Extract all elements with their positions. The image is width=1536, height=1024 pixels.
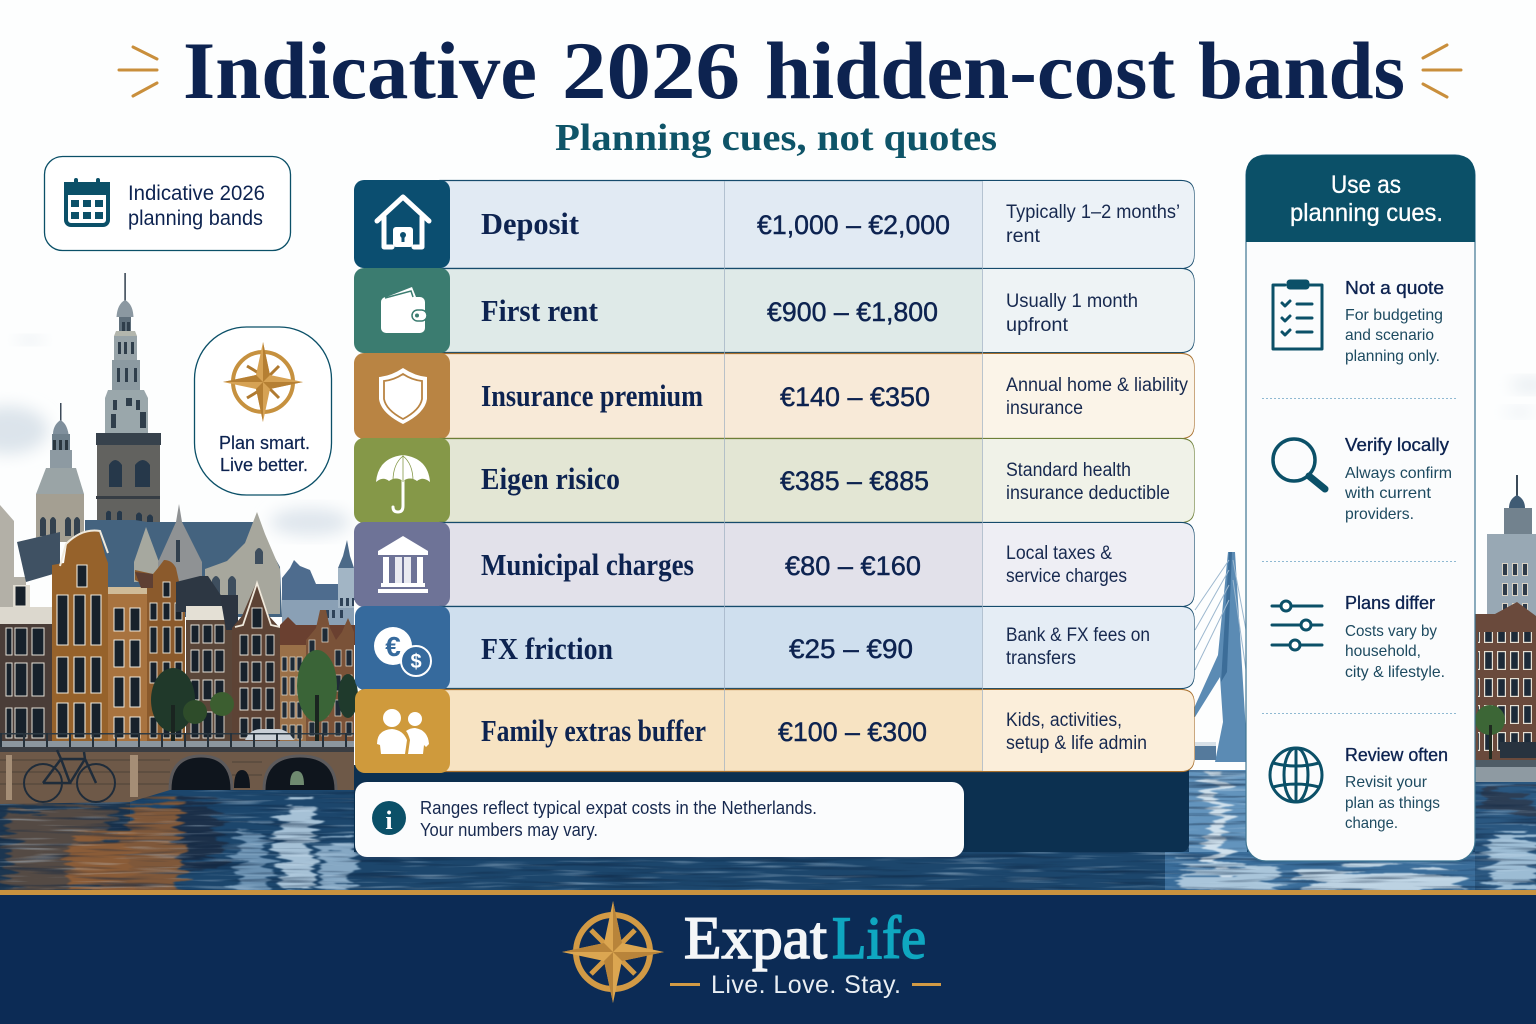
small church tower — [36, 403, 84, 542]
row: family extras buffer: Kids, activities, — [1006, 710, 1122, 731]
item: not a quote: and scenario — [1345, 327, 1434, 344]
row: municipal charges: Local taxes & — [1006, 543, 1112, 564]
icon: umbrella — [376, 455, 430, 512]
row: fx friction: FX friction — [481, 631, 613, 666]
icon: magnifier — [1273, 439, 1325, 489]
item: verify locally — [1273, 435, 1452, 523]
title accent: right rays — [1423, 45, 1461, 97]
item: plans differ: household, — [1345, 643, 1421, 660]
icon: compass — [223, 342, 303, 422]
item: verify locally: Verify locally — [1345, 435, 1449, 455]
house: dark roof with white cornice — [176, 576, 232, 746]
row: insurance premium: €140 – €350 — [780, 382, 930, 412]
icon: calendar — [66, 180, 108, 225]
logo wordmark: Expat — [684, 905, 827, 971]
right tower and brick building — [1475, 475, 1536, 782]
footer band — [0, 890, 1536, 1024]
panel header: planning cues. — [1290, 199, 1443, 227]
panel header: Use as — [1331, 171, 1401, 199]
row: deposit — [354, 180, 1194, 268]
icon: info: i — [385, 806, 393, 835]
row: deposit: Deposit — [481, 206, 580, 241]
icon: euro and dollar coins: $ — [410, 651, 422, 673]
badge: plan smart — [194, 327, 332, 495]
church roofs and stone gables — [85, 504, 282, 617]
item: review often — [1270, 745, 1448, 832]
row: eigen risico: insurance deductible — [1006, 483, 1170, 504]
note text: Your numbers may vary. — [420, 820, 598, 840]
icon: euro and dollar coins: € — [385, 631, 401, 662]
icon: info — [372, 801, 406, 835]
row: first rent — [354, 268, 1194, 353]
logo: compass — [562, 901, 664, 1003]
row: municipal charges: Municipal charges — [481, 547, 694, 582]
row: first rent: upfront — [1006, 315, 1069, 336]
title: bands — [1198, 25, 1405, 116]
row: fx friction: €25 – €90 — [789, 634, 913, 664]
icon: house with lock — [377, 197, 429, 247]
row: fx friction: Bank & FX fees on — [1006, 625, 1150, 646]
item: verify locally: Always confirm — [1345, 465, 1452, 482]
row: eigen risico: €385 – €885 — [780, 466, 929, 496]
item: review often: change. — [1345, 815, 1398, 832]
panel header — [1246, 155, 1475, 242]
row: eigen risico — [354, 438, 1194, 523]
row: first rent: Usually 1 month — [1006, 291, 1138, 312]
panel: use as planning cues — [1246, 155, 1475, 861]
item: verify locally: providers. — [1345, 506, 1414, 523]
badge: planning bands — [44, 156, 290, 250]
row: eigen risico: Standard health — [1006, 460, 1131, 481]
title: 2026 — [562, 25, 740, 116]
row: first rent: First rent — [481, 293, 599, 328]
note text: Ranges reflect typical expat costs in the Netherlands. — [420, 798, 817, 818]
reflections — [8, 775, 1536, 894]
row: municipal charges — [354, 522, 1194, 607]
logo tagline: Live. Love. Stay. — [711, 971, 901, 999]
badge tagline: Plan smart. — [219, 433, 310, 453]
row: municipal charges: service charges — [1006, 566, 1127, 587]
row: insurance premium: insurance — [1006, 398, 1083, 419]
subtitle: Planning cues, not quotes — [555, 117, 997, 159]
row: family extras buffer: setup & life admin — [1006, 733, 1147, 754]
row: insurance premium: Annual home & liability — [1006, 375, 1188, 396]
row: eigen risico: Eigen risico — [481, 461, 620, 496]
stone bridge — [0, 747, 354, 804]
icon: sliders — [1272, 601, 1322, 650]
item: plans differ: Costs vary by — [1345, 623, 1437, 640]
row: municipal charges: €80 – €160 — [785, 551, 921, 581]
icon: family — [377, 709, 429, 754]
item: review often: plan as things — [1345, 795, 1440, 812]
title accent: left rays — [119, 47, 157, 96]
row: deposit: €1,000 – €2,000 — [757, 210, 950, 240]
logo wordmark — [684, 905, 926, 971]
background: Amsterdam canal skyline — [0, 273, 1536, 804]
row: family extras buffer — [355, 689, 1194, 773]
item: not a quote: Not a quote — [1345, 278, 1444, 298]
icon: euro and dollar coins — [374, 627, 431, 676]
table of cost bands — [354, 180, 1194, 773]
icon: globe — [1270, 748, 1322, 802]
quay railing and car — [0, 729, 354, 748]
logo wordmark: Life — [832, 905, 926, 971]
bicycle — [24, 750, 115, 802]
row: deposit: rent — [1006, 226, 1041, 247]
house: white cornice left — [0, 505, 60, 746]
badge text: Indicative 2026 — [128, 182, 265, 205]
right bridge pylon and stays — [1190, 552, 1246, 762]
distant buildings right of row — [282, 540, 356, 635]
row: deposit: Typically 1–2 months’ — [1006, 202, 1180, 223]
badge tagline — [219, 433, 310, 475]
badge text: planning bands — [128, 207, 263, 230]
badge text — [128, 182, 265, 230]
house: brown stepped gable — [135, 560, 185, 746]
badge tagline: Live better. — [220, 455, 308, 475]
row: insurance premium — [354, 353, 1194, 439]
title: hidden-cost — [765, 25, 1175, 116]
house: orange brick gable — [52, 531, 108, 746]
item: review often: Revisit your — [1345, 774, 1428, 791]
row: fx friction: transfers — [1006, 648, 1076, 669]
dark backing block under table — [354, 765, 1189, 852]
canal water — [0, 770, 1536, 894]
item: not a quote — [1273, 278, 1444, 365]
row: insurance premium: Insurance premium — [481, 378, 703, 413]
item: not a quote: planning only. — [1345, 348, 1440, 365]
item: verify locally: with current — [1344, 485, 1432, 502]
trees — [151, 650, 358, 747]
item: plans differ: Plans differ — [1345, 593, 1435, 613]
icon: wallet — [381, 287, 427, 333]
item: plans differ — [1272, 593, 1445, 681]
icon: shield — [379, 368, 427, 424]
house: tan brick — [108, 587, 148, 747]
icon: checklist — [1273, 281, 1322, 349]
callout: ranges note — [355, 782, 964, 857]
row: fx friction — [355, 606, 1194, 690]
row: family extras buffer: Family extras buffer — [481, 713, 706, 748]
item: plans differ: city & lifestyle. — [1345, 664, 1445, 681]
row: first rent: €900 – €1,800 — [767, 297, 938, 327]
big church tower — [96, 273, 161, 541]
title: Indicative — [183, 25, 537, 116]
row: family extras buffer: €100 – €300 — [778, 717, 927, 747]
item: review often: Review often — [1345, 745, 1448, 765]
title — [183, 25, 1405, 116]
item: not a quote: For budgeting — [1345, 307, 1443, 324]
icon: civic building — [378, 536, 428, 593]
note text — [420, 798, 817, 840]
house: brown pointed gable — [220, 581, 280, 746]
houses: far right row — [280, 610, 356, 756]
